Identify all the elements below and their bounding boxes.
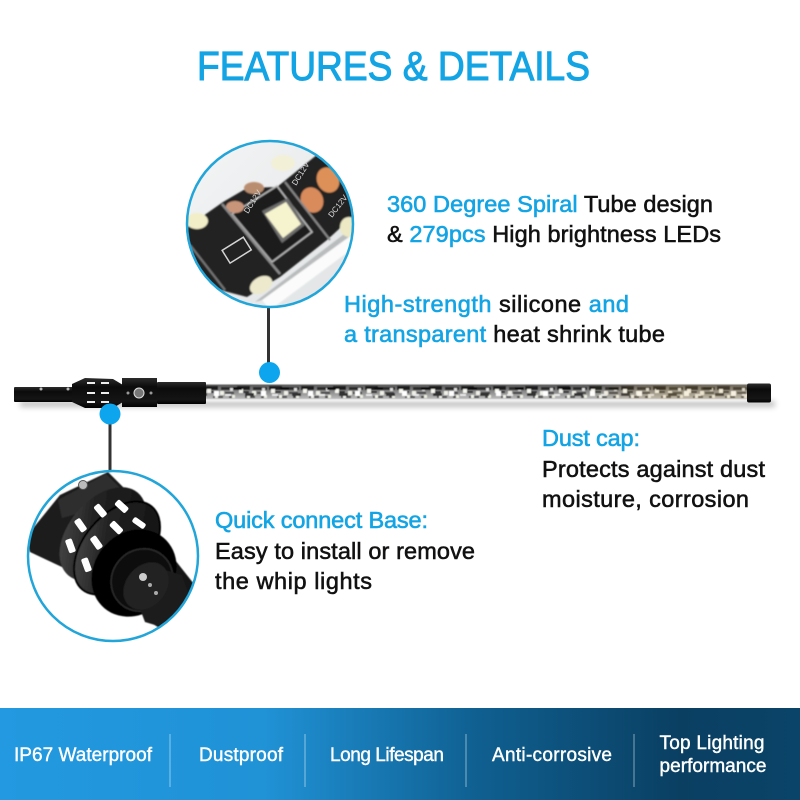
text: dust cap: Dust cap: [542, 425, 640, 451]
text: quick connect base: the whip lights [215, 568, 372, 594]
dot: LED tube marker [259, 362, 280, 383]
label: anti-corrosive: Anti-corrosive [492, 745, 612, 766]
base connector [14, 378, 206, 408]
text: quick connect base [215, 507, 475, 594]
text: silicone [344, 291, 665, 347]
title: FEATURES & DETAILS [197, 43, 590, 89]
product: LED whip light [14, 378, 775, 408]
label: DC12V print: DC12V [326, 193, 350, 219]
label: top lighting [660, 733, 766, 777]
circle: LED strip close-up [185, 138, 364, 310]
label: DC12V print: DC12V [290, 160, 312, 187]
tube with LEDs [205, 384, 748, 402]
text: silicone: High-strength silicone and [344, 291, 629, 317]
label: dustproof: Dustproof [199, 745, 284, 766]
feature bar [0, 708, 800, 800]
label: lifespan: Long Lifespan [330, 745, 444, 766]
text: silicone: a transparent heat shrink tube [344, 321, 665, 347]
text: quick connect base: Quick connect Base: [215, 507, 428, 533]
label: top lighting: performance [660, 756, 766, 777]
connector: LED zoom to tube [267, 300, 270, 365]
dust cap [747, 384, 771, 402]
label: DC12V print: DC12V [242, 188, 264, 215]
text: dust cap: moisture, corrosion [542, 486, 749, 512]
text: spiral tube [387, 191, 721, 247]
text: spiral tube: & 279pcs High brightness LEDs [387, 221, 721, 247]
label: DC12V print [242, 160, 350, 219]
text: dust cap: Protects against dust [542, 456, 765, 482]
connector: base zoom to tube [108, 420, 112, 474]
label: top lighting: Top Lighting [660, 733, 764, 754]
circle: quick connect base close-up [25, 468, 205, 644]
dot: base marker [100, 404, 120, 424]
text: quick connect base: Easy to install or remove [215, 538, 475, 564]
text: spiral tube: 360 Degree Spiral Tube design [387, 191, 713, 217]
label: IP67: IP67 Waterproof [14, 745, 153, 766]
text: dust cap [542, 425, 765, 512]
